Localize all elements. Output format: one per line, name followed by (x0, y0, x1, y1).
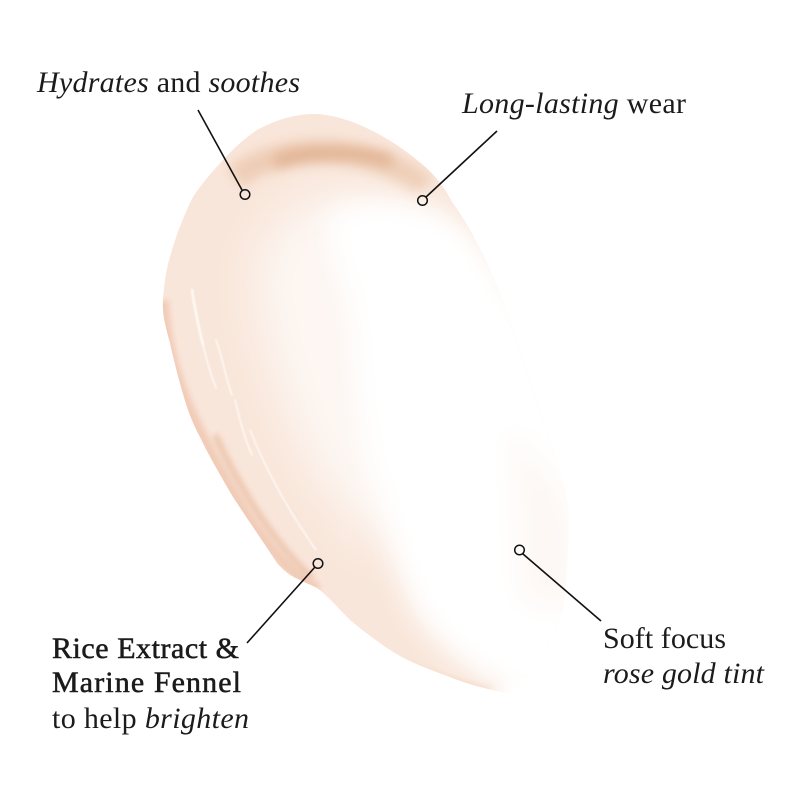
swatch shading (163, 152, 490, 692)
cream swatch (162, 114, 568, 694)
label: hydrates and soothes: Hydrates and soothes (36, 66, 300, 99)
swatch white centre (332, 187, 568, 695)
swatch pale veil (247, 184, 378, 541)
label: long-lasting wear: Long-lasting wear (461, 87, 686, 120)
label: rice extract and marine fennel: Rice Extract & (52, 632, 239, 665)
swatch gloss highlights (192, 290, 316, 550)
label: rice extract and marine fennel: to help brighten (52, 702, 249, 735)
swatch pale right patch (524, 469, 565, 596)
label: soft focus rose gold tint (515, 545, 765, 690)
label: soft focus rose gold tint: rose gold tint (603, 657, 765, 690)
label: rice extract and marine fennel (52, 559, 323, 735)
label: hydrates and soothes (36, 66, 300, 199)
label: long-lasting wear (418, 87, 686, 205)
label: rice extract and marine fennel: Marine Fennel (52, 666, 241, 699)
label: soft focus rose gold tint: Soft focus (603, 622, 726, 655)
